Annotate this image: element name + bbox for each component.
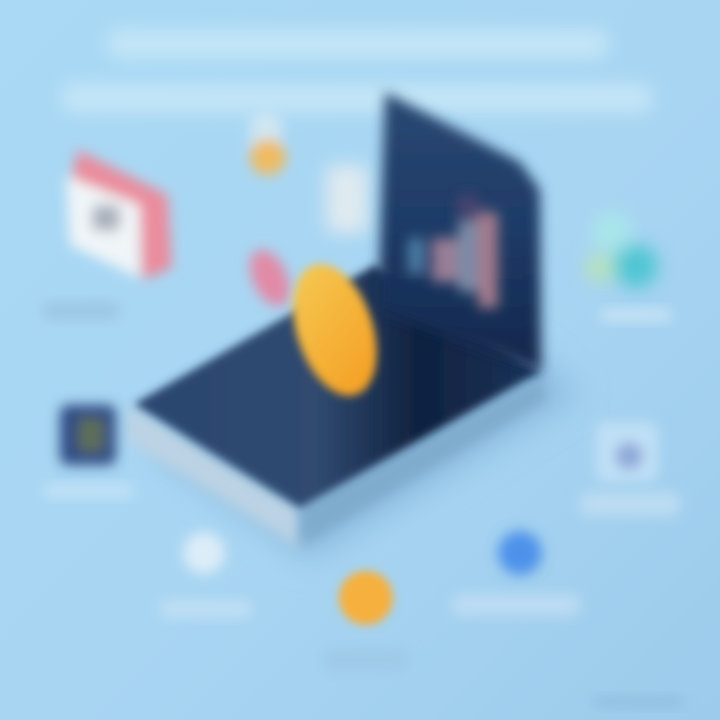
title [62, 30, 652, 112]
icon: teal chart [586, 212, 658, 288]
teal label [600, 308, 672, 322]
icon: document [326, 165, 368, 233]
icon: calendar [66, 150, 172, 280]
icon: white circle [183, 532, 225, 574]
blue circle label [452, 594, 580, 616]
screen bar chart [408, 195, 498, 308]
icon: white panel with dot [596, 422, 658, 482]
icon: blue circle [498, 531, 542, 575]
keyboard deck [134, 265, 540, 508]
laptop [126, 92, 546, 548]
laptop screen [378, 92, 541, 372]
dark app label [44, 484, 134, 498]
panel label [580, 492, 680, 516]
icon: pink tag [242, 244, 298, 312]
icon: yellow coin [278, 254, 392, 406]
white circle label [160, 600, 252, 618]
icon: orange badge [250, 112, 286, 175]
laptop base right edge [300, 378, 546, 548]
footer mark [592, 696, 684, 708]
laptop base left edge [126, 405, 300, 548]
icon: orange circle [339, 571, 393, 625]
orange circle label [322, 648, 410, 672]
icon: dark app [60, 405, 116, 465]
laptop shadow [150, 350, 580, 560]
calendar label [42, 302, 120, 320]
